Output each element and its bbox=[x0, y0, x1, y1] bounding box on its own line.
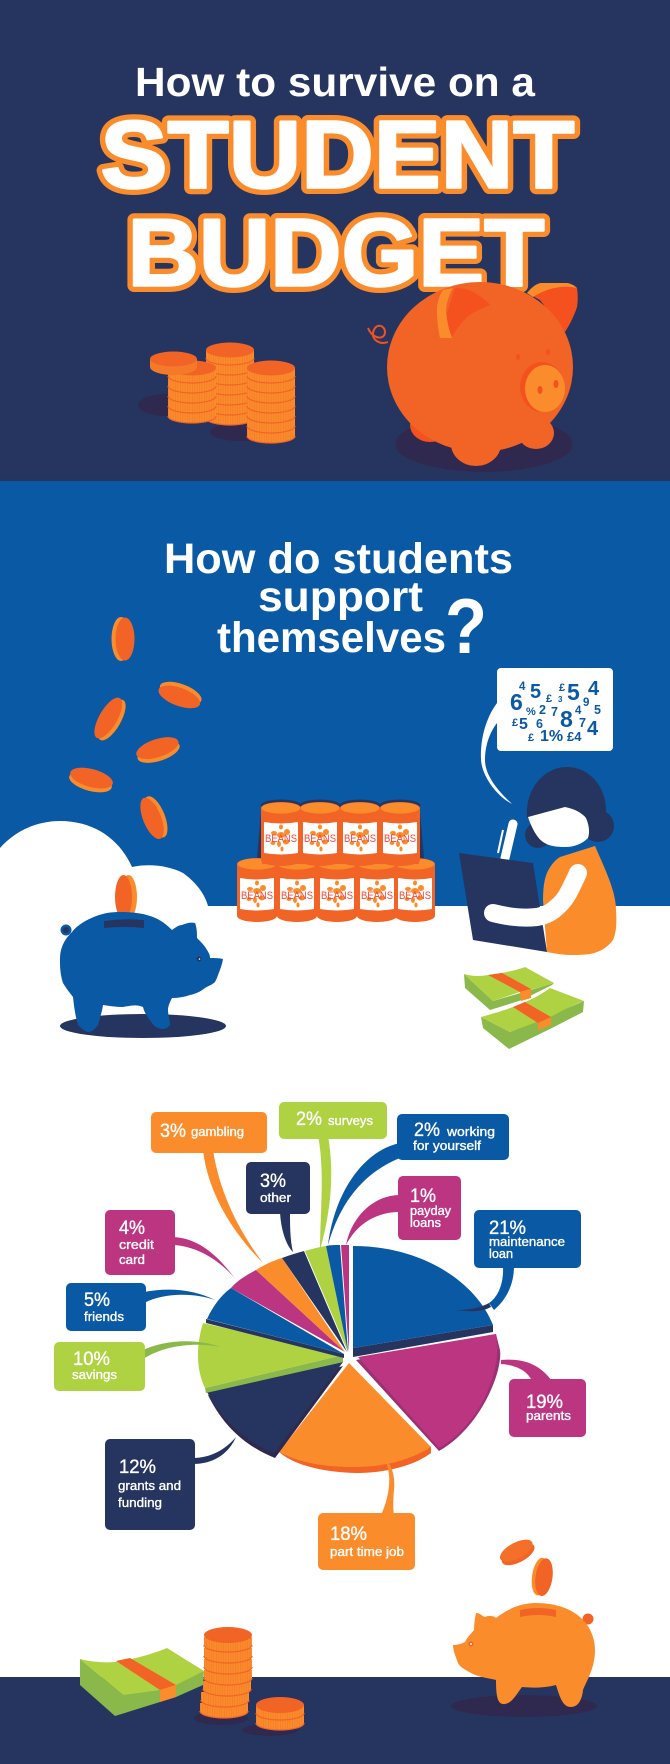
slice: other bbox=[282, 1251, 347, 1352]
heading: how do students support themselves: themselves bbox=[217, 614, 446, 662]
callout: 10% savings bbox=[54, 1341, 221, 1391]
callout: 2% surveys: 2% bbox=[296, 1109, 322, 1130]
callout: 21% maintenance loan bbox=[456, 1210, 581, 1311]
callout: 4% credit card: credit bbox=[119, 1237, 154, 1252]
callout: 3% gambling: gambling bbox=[191, 1124, 244, 1139]
speech bubble with numbers: £ bbox=[559, 682, 565, 694]
can row: top: BEANS bbox=[304, 833, 336, 845]
callout: 19% parents: 19% bbox=[526, 1392, 563, 1413]
callout: 2% working for yourself: 2% bbox=[414, 1120, 440, 1141]
callout: 21% maintenance loan: loan bbox=[489, 1246, 513, 1261]
can row: top: BEANS bbox=[384, 833, 416, 845]
slice: gambling bbox=[256, 1258, 345, 1352]
can row: bottom: BEANS bbox=[361, 890, 393, 902]
icon: student with clipboard bbox=[459, 767, 616, 955]
face bbox=[528, 807, 589, 847]
speech bubble with numbers: 6 bbox=[536, 717, 543, 731]
arm bbox=[493, 873, 578, 918]
speech bubble with numbers: £ bbox=[512, 717, 518, 729]
background: blue section band bbox=[0, 481, 670, 906]
heading: how do students support themselves: ? bbox=[445, 582, 487, 670]
can row: top: BEANS bbox=[344, 833, 376, 845]
callout: 3% other: 3% bbox=[260, 1171, 286, 1192]
icon: bundles of cash bbox=[464, 967, 584, 1049]
callout: 5% friends: friends bbox=[84, 1309, 124, 1324]
callout: 4% credit card: 4% bbox=[119, 1218, 145, 1239]
title bbox=[100, 59, 574, 306]
callout: 2% surveys bbox=[279, 1102, 387, 1250]
icon: falling coins above orange pig bbox=[497, 1535, 555, 1597]
callout: 1% payday loans: 1% bbox=[410, 1186, 436, 1207]
speech bubble with numbers: 9 bbox=[583, 697, 589, 709]
speech bubble with numbers: 2 bbox=[539, 703, 546, 717]
clipboard bbox=[459, 853, 547, 952]
callout: 1% payday loans: loans bbox=[410, 1215, 441, 1230]
pig body bbox=[387, 282, 573, 466]
speech bubble with numbers: 5 bbox=[530, 681, 541, 703]
heading: how do students support themselves: support bbox=[258, 573, 423, 621]
can row: top bbox=[261, 802, 420, 866]
can row: bottom: BEANS bbox=[241, 890, 273, 902]
pie chart bbox=[198, 1245, 500, 1473]
callout: 19% parents bbox=[501, 1360, 586, 1437]
can row: top: BEANS bbox=[265, 833, 297, 845]
title: How to survive on a bbox=[135, 59, 536, 105]
cash bundle: upper bbox=[464, 967, 554, 1010]
hair bbox=[525, 767, 614, 848]
heading: how do students support themselves bbox=[164, 535, 513, 670]
callout: 1% payday loans bbox=[346, 1176, 461, 1245]
callout: 3% other bbox=[246, 1162, 310, 1252]
slice: grants and funding bbox=[207, 1362, 343, 1458]
callout: 4% credit card bbox=[105, 1210, 236, 1280]
slice: working for yourself bbox=[326, 1245, 348, 1352]
slice: savings bbox=[198, 1323, 343, 1393]
can row: bottom: BEANS bbox=[399, 890, 431, 902]
callout: 1% payday loans: payday bbox=[410, 1203, 451, 1218]
icon: cloud bbox=[0, 821, 208, 906]
slice: surveys bbox=[305, 1246, 348, 1352]
icon: orange piggy bank bbox=[368, 282, 578, 472]
callout: 21% maintenance loan: 21% bbox=[489, 1218, 526, 1239]
slice: maintenance loan bbox=[353, 1246, 493, 1357]
callout: 18% part time job: part time job bbox=[330, 1544, 404, 1559]
speech bubble with numbers: 5 bbox=[567, 679, 580, 705]
callout: 5% friends: 5% bbox=[84, 1290, 110, 1311]
title: BUDGET bbox=[128, 200, 544, 306]
slice: part time job bbox=[279, 1363, 431, 1473]
callout: 12% grants and funding: grants and bbox=[118, 1478, 181, 1493]
background: white section bbox=[0, 906, 670, 1677]
icon: coin stacks on footer bbox=[194, 1627, 304, 1736]
callout: 19% parents: parents bbox=[526, 1408, 572, 1423]
callout: 2% working for yourself: for yourself bbox=[413, 1138, 481, 1153]
heading: how do students support themselves: How do students bbox=[164, 535, 513, 583]
callout: 2% working for yourself bbox=[328, 1114, 509, 1245]
can row: bottom bbox=[237, 858, 435, 922]
callout: 12% grants and funding: funding bbox=[118, 1495, 162, 1510]
callout: 3% gambling bbox=[151, 1112, 267, 1263]
callout: 18% part time job: 18% bbox=[330, 1524, 367, 1545]
icon: orange piggy bank on footer bbox=[451, 1603, 597, 1717]
slice: friends bbox=[206, 1288, 344, 1358]
icon: blue piggy bank with coin bbox=[60, 875, 226, 1038]
callout: 2% surveys: surveys bbox=[328, 1113, 373, 1128]
speech bubble with numbers: 3 bbox=[558, 695, 563, 704]
speech bubble with numbers: 4 bbox=[519, 681, 526, 693]
speech bubble with numbers bbox=[481, 668, 613, 804]
speech bubble with numbers: £4 bbox=[567, 729, 582, 744]
speech bubble with numbers: 5 bbox=[519, 716, 528, 733]
speech bubble with numbers: 4 bbox=[588, 678, 600, 700]
body bbox=[543, 846, 616, 955]
speech bubble with numbers: % bbox=[526, 706, 536, 718]
callout: 3% other: other bbox=[260, 1190, 292, 1205]
background: navy footer band bbox=[0, 1677, 670, 1764]
title: BUDGET bbox=[128, 200, 544, 306]
callout: 2% working for yourself: working bbox=[446, 1124, 495, 1139]
speech bubble with numbers: 8 bbox=[560, 706, 573, 732]
speech bubble with numbers: 7 bbox=[551, 705, 558, 719]
speech bubble with numbers: £ bbox=[528, 732, 534, 744]
callout: 18% part time job bbox=[318, 1448, 415, 1570]
icon: stacked bean cans bbox=[237, 800, 435, 922]
slice: credit card bbox=[231, 1270, 345, 1352]
title: STUDENT bbox=[100, 102, 574, 208]
pen bbox=[498, 824, 513, 858]
slice: parents bbox=[356, 1334, 500, 1451]
can row: bottom: BEANS bbox=[281, 890, 313, 902]
title: STUDENT bbox=[100, 102, 574, 208]
speech bubble with numbers: 7 bbox=[579, 716, 586, 730]
callout: 12% grants and funding: 12% bbox=[119, 1457, 156, 1478]
slice: payday loans bbox=[341, 1245, 349, 1353]
callout: 21% maintenance loan: maintenance bbox=[489, 1234, 565, 1249]
icon: falling coins bbox=[67, 617, 204, 842]
callout: 5% friends bbox=[66, 1283, 215, 1331]
speech bubble with numbers: 5 bbox=[594, 703, 601, 717]
callout: 12% grants and funding bbox=[105, 1437, 236, 1530]
speech bubble with numbers: 1% bbox=[540, 728, 563, 745]
can row: bottom: BEANS bbox=[321, 890, 353, 902]
callout: 10% savings: 10% bbox=[73, 1349, 110, 1370]
speech bubble with numbers: £ bbox=[546, 693, 552, 705]
cash bundle: lower bbox=[481, 988, 584, 1049]
callout: 3% gambling: 3% bbox=[160, 1121, 186, 1142]
background: navy header band bbox=[0, 0, 670, 481]
speech bubble with numbers: 4 bbox=[575, 705, 582, 717]
icon: cash bundle on footer bbox=[80, 1648, 204, 1716]
icon: coin stacks bbox=[138, 342, 295, 443]
callout: 10% savings: savings bbox=[72, 1367, 118, 1382]
callout: 4% credit card: card bbox=[119, 1252, 145, 1267]
speech bubble with numbers: 4 bbox=[587, 718, 599, 740]
speech bubble with numbers: 6 bbox=[510, 689, 523, 715]
